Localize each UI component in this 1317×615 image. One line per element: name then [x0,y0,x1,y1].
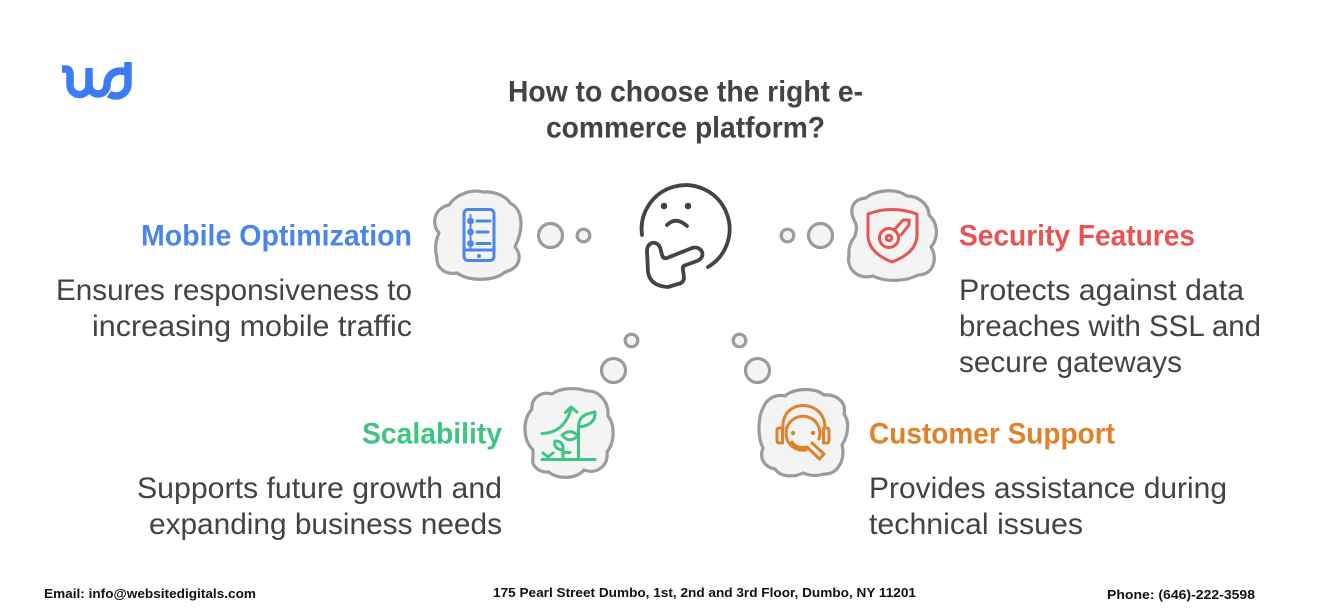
icon: thinking face [642,185,730,287]
text: security description: breaches with SSL and [959,310,1261,343]
panel: scalability [137,334,638,541]
panel: mobile optimization [56,191,590,343]
bubbles: mobile [538,224,590,248]
icon: headset smiley [777,406,829,459]
text: customer support description [869,472,1227,541]
text: customer support description: Provides assistance during [869,472,1227,505]
heading: mobile optimization: Mobile Optimization [141,220,412,252]
text: scalability description [137,472,502,541]
text: scalability description: expanding business needs [149,508,502,541]
text: mobile description: increasing mobile traffic [92,310,412,343]
title: How to choose the right e- [508,76,863,108]
thought cloud: customer support [759,389,848,476]
footer: contact details [44,585,1255,602]
text: scalability description: Supports future growth and [137,472,502,505]
footer: contact details: Email: info@websitedigitals.com [44,586,256,601]
text: security description: secure gateways [959,346,1182,379]
icon: growing plants [542,407,595,460]
text: mobile description: Ensures responsiveness to [56,274,412,307]
text: mobile description [56,274,412,343]
panel: customer support [733,334,1227,541]
text: customer support description: technical issues [869,508,1083,541]
panel: security features [781,191,1261,379]
bubbles: scalability [602,334,638,382]
footer: contact details: Phone: (646)-222-3598 [1107,587,1255,602]
heading: customer support: Customer Support [869,418,1115,450]
logo: wd [62,62,128,96]
bubbles: security [781,224,832,248]
thought cloud: security [849,191,936,280]
text: security description: Protects against data [959,274,1244,307]
text: security description [959,274,1261,379]
icon: shield key [868,210,917,262]
heading: security features: Security Features [959,220,1195,252]
thought cloud: mobile [435,191,521,279]
bubbles: customer support [733,334,770,382]
title: commerce platform? [546,112,825,144]
heading: scalability: Scalability [362,418,502,450]
title [508,76,863,144]
footer: contact details: 175 Pearl Street Dumbo, 1st, 2nd and 3rd Floor, Dumbo, NY 11201 [493,585,916,600]
icon: phone checklist [464,210,494,260]
thought cloud: scalability [525,389,613,477]
